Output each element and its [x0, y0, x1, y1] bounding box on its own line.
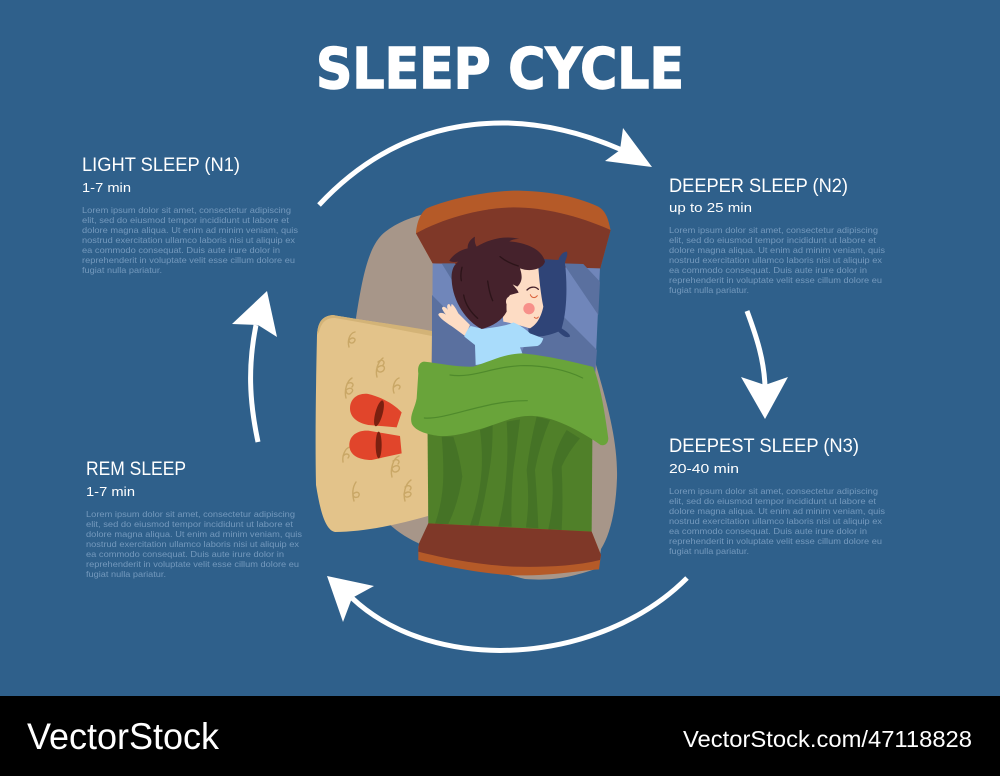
text block: REM sleep: ea commodo consequat. Duis aute irure dolor in — [86, 549, 284, 559]
text block: REM sleep: reprehenderit in voluptate velit esse cillum dolore eu — [86, 559, 299, 569]
cheek — [523, 303, 535, 314]
text block: light sleep: dolore magna aliqua. Ut enim ad minim veniam, quis — [82, 225, 298, 235]
text block: REM sleep: Lorem ipsum dolor sit amet, consectetur adipiscing — [86, 509, 295, 519]
text block: deepest sleep: DEEPEST SLEEP (N3) — [669, 436, 859, 457]
text block: deepest sleep: dolore magna aliqua. Ut enim ad minim veniam, quis — [669, 506, 885, 516]
illustration: sleeping child in bed — [316, 191, 617, 580]
floor shadow blob — [356, 214, 617, 580]
text block: deepest sleep: elit, sed do eiusmod tempor incididunt ut labore et — [669, 496, 877, 506]
pillow — [528, 252, 570, 337]
text block: deeper sleep: fugiat nulla pariatur. — [669, 285, 749, 295]
text block: deepest sleep: ea commodo consequat. Duis aute irure dolor in — [669, 526, 867, 536]
pajama — [464, 322, 543, 365]
text block: deeper sleep: elit, sed do eiusmod tempor incididunt ut labore et — [669, 235, 877, 245]
footboard — [418, 523, 601, 575]
text block: deeper sleep: Lorem ipsum dolor sit amet, consectetur adipiscing — [669, 225, 878, 235]
text block: deepest sleep: reprehenderit in voluptate velit esse cillum dolore eu — [669, 536, 882, 546]
text block: light sleep: 1-7 min — [82, 180, 131, 195]
arrow: deeper sleep to deepest sleep — [741, 311, 788, 419]
text block: light sleep: fugiat nulla pariatur. — [82, 265, 162, 275]
arrow: deepest sleep to REM sleep — [327, 576, 687, 650]
text block: light sleep: LIGHT SLEEP (N1) — [82, 155, 240, 176]
ear — [506, 296, 518, 308]
closed eye — [530, 295, 537, 298]
text block: light sleep — [82, 155, 298, 275]
text block: deepest sleep — [669, 436, 885, 556]
text block: deeper sleep — [669, 176, 885, 295]
text block: deepest sleep: fugiat nulla pariatur. — [669, 546, 749, 556]
text block: deeper sleep: dolore magna aliqua. Ut enim ad minim veniam, quis — [669, 245, 885, 255]
lower blanket with stripes — [427, 403, 593, 533]
text block: deepest sleep: 20-40 min — [669, 461, 739, 476]
title: SLEEP CYCLE — [316, 37, 684, 102]
upper blanket fold — [411, 353, 608, 445]
bed sheet with stripes — [432, 263, 600, 377]
text block: REM sleep: REM SLEEP — [86, 459, 186, 480]
text block: deeper sleep: DEEPER SLEEP (N2) — [669, 176, 848, 197]
hand and arm — [438, 304, 470, 336]
text block: light sleep: Lorem ipsum dolor sit amet, consectetur adipiscing — [82, 205, 291, 215]
hair — [449, 237, 545, 329]
hair strands — [461, 257, 518, 318]
text block: deeper sleep: nostrud exercitation ullamco laboris nisi ut aliquip ex — [669, 255, 883, 265]
watermark footer bar — [0, 696, 1000, 776]
mouth — [534, 317, 538, 318]
arrow: light sleep to deeper sleep — [319, 123, 652, 205]
text block: deeper sleep: ea commodo consequat. Duis aute irure dolor in — [669, 265, 867, 275]
face — [500, 267, 543, 328]
text block: REM sleep: 1-7 min — [86, 484, 135, 499]
boy — [438, 237, 545, 365]
text block: REM sleep: elit, sed do eiusmod tempor incididunt ut labore et — [86, 519, 294, 529]
text block: REM sleep — [86, 459, 302, 579]
rug with squiggles — [316, 315, 432, 532]
text block: REM sleep: dolore magna aliqua. Ut enim ad minim veniam, quis — [86, 529, 302, 539]
slippers — [349, 394, 402, 460]
headboard — [416, 191, 611, 269]
text block: REM sleep: fugiat nulla pariatur. — [86, 569, 166, 579]
text block: deeper sleep: up to 25 min — [669, 200, 752, 215]
watermark footer bar: VectorStock.com/47118828 — [683, 726, 972, 752]
text block: light sleep: elit, sed do eiusmod tempor incididunt ut labore et — [82, 215, 290, 225]
text block: deeper sleep: reprehenderit in voluptate velit esse cillum dolore eu — [669, 275, 882, 285]
text block: light sleep: reprehenderit in voluptate velit esse cillum dolore eu — [82, 255, 295, 265]
text block: deepest sleep: Lorem ipsum dolor sit amet, consectetur adipiscing — [669, 486, 878, 496]
watermark footer bar: VectorStock — [27, 716, 219, 757]
text block: light sleep: ea commodo consequat. Duis aute irure dolor in — [82, 245, 280, 255]
arrow: REM sleep to light sleep — [232, 291, 277, 442]
text block: deepest sleep: nostrud exercitation ullamco laboris nisi ut aliquip ex — [669, 516, 883, 526]
eyebrow — [527, 287, 538, 290]
text block: REM sleep: nostrud exercitation ullamco laboris nisi ut aliquip ex — [86, 539, 300, 549]
text block: light sleep: nostrud exercitation ullamco laboris nisi ut aliquip ex — [82, 235, 296, 245]
